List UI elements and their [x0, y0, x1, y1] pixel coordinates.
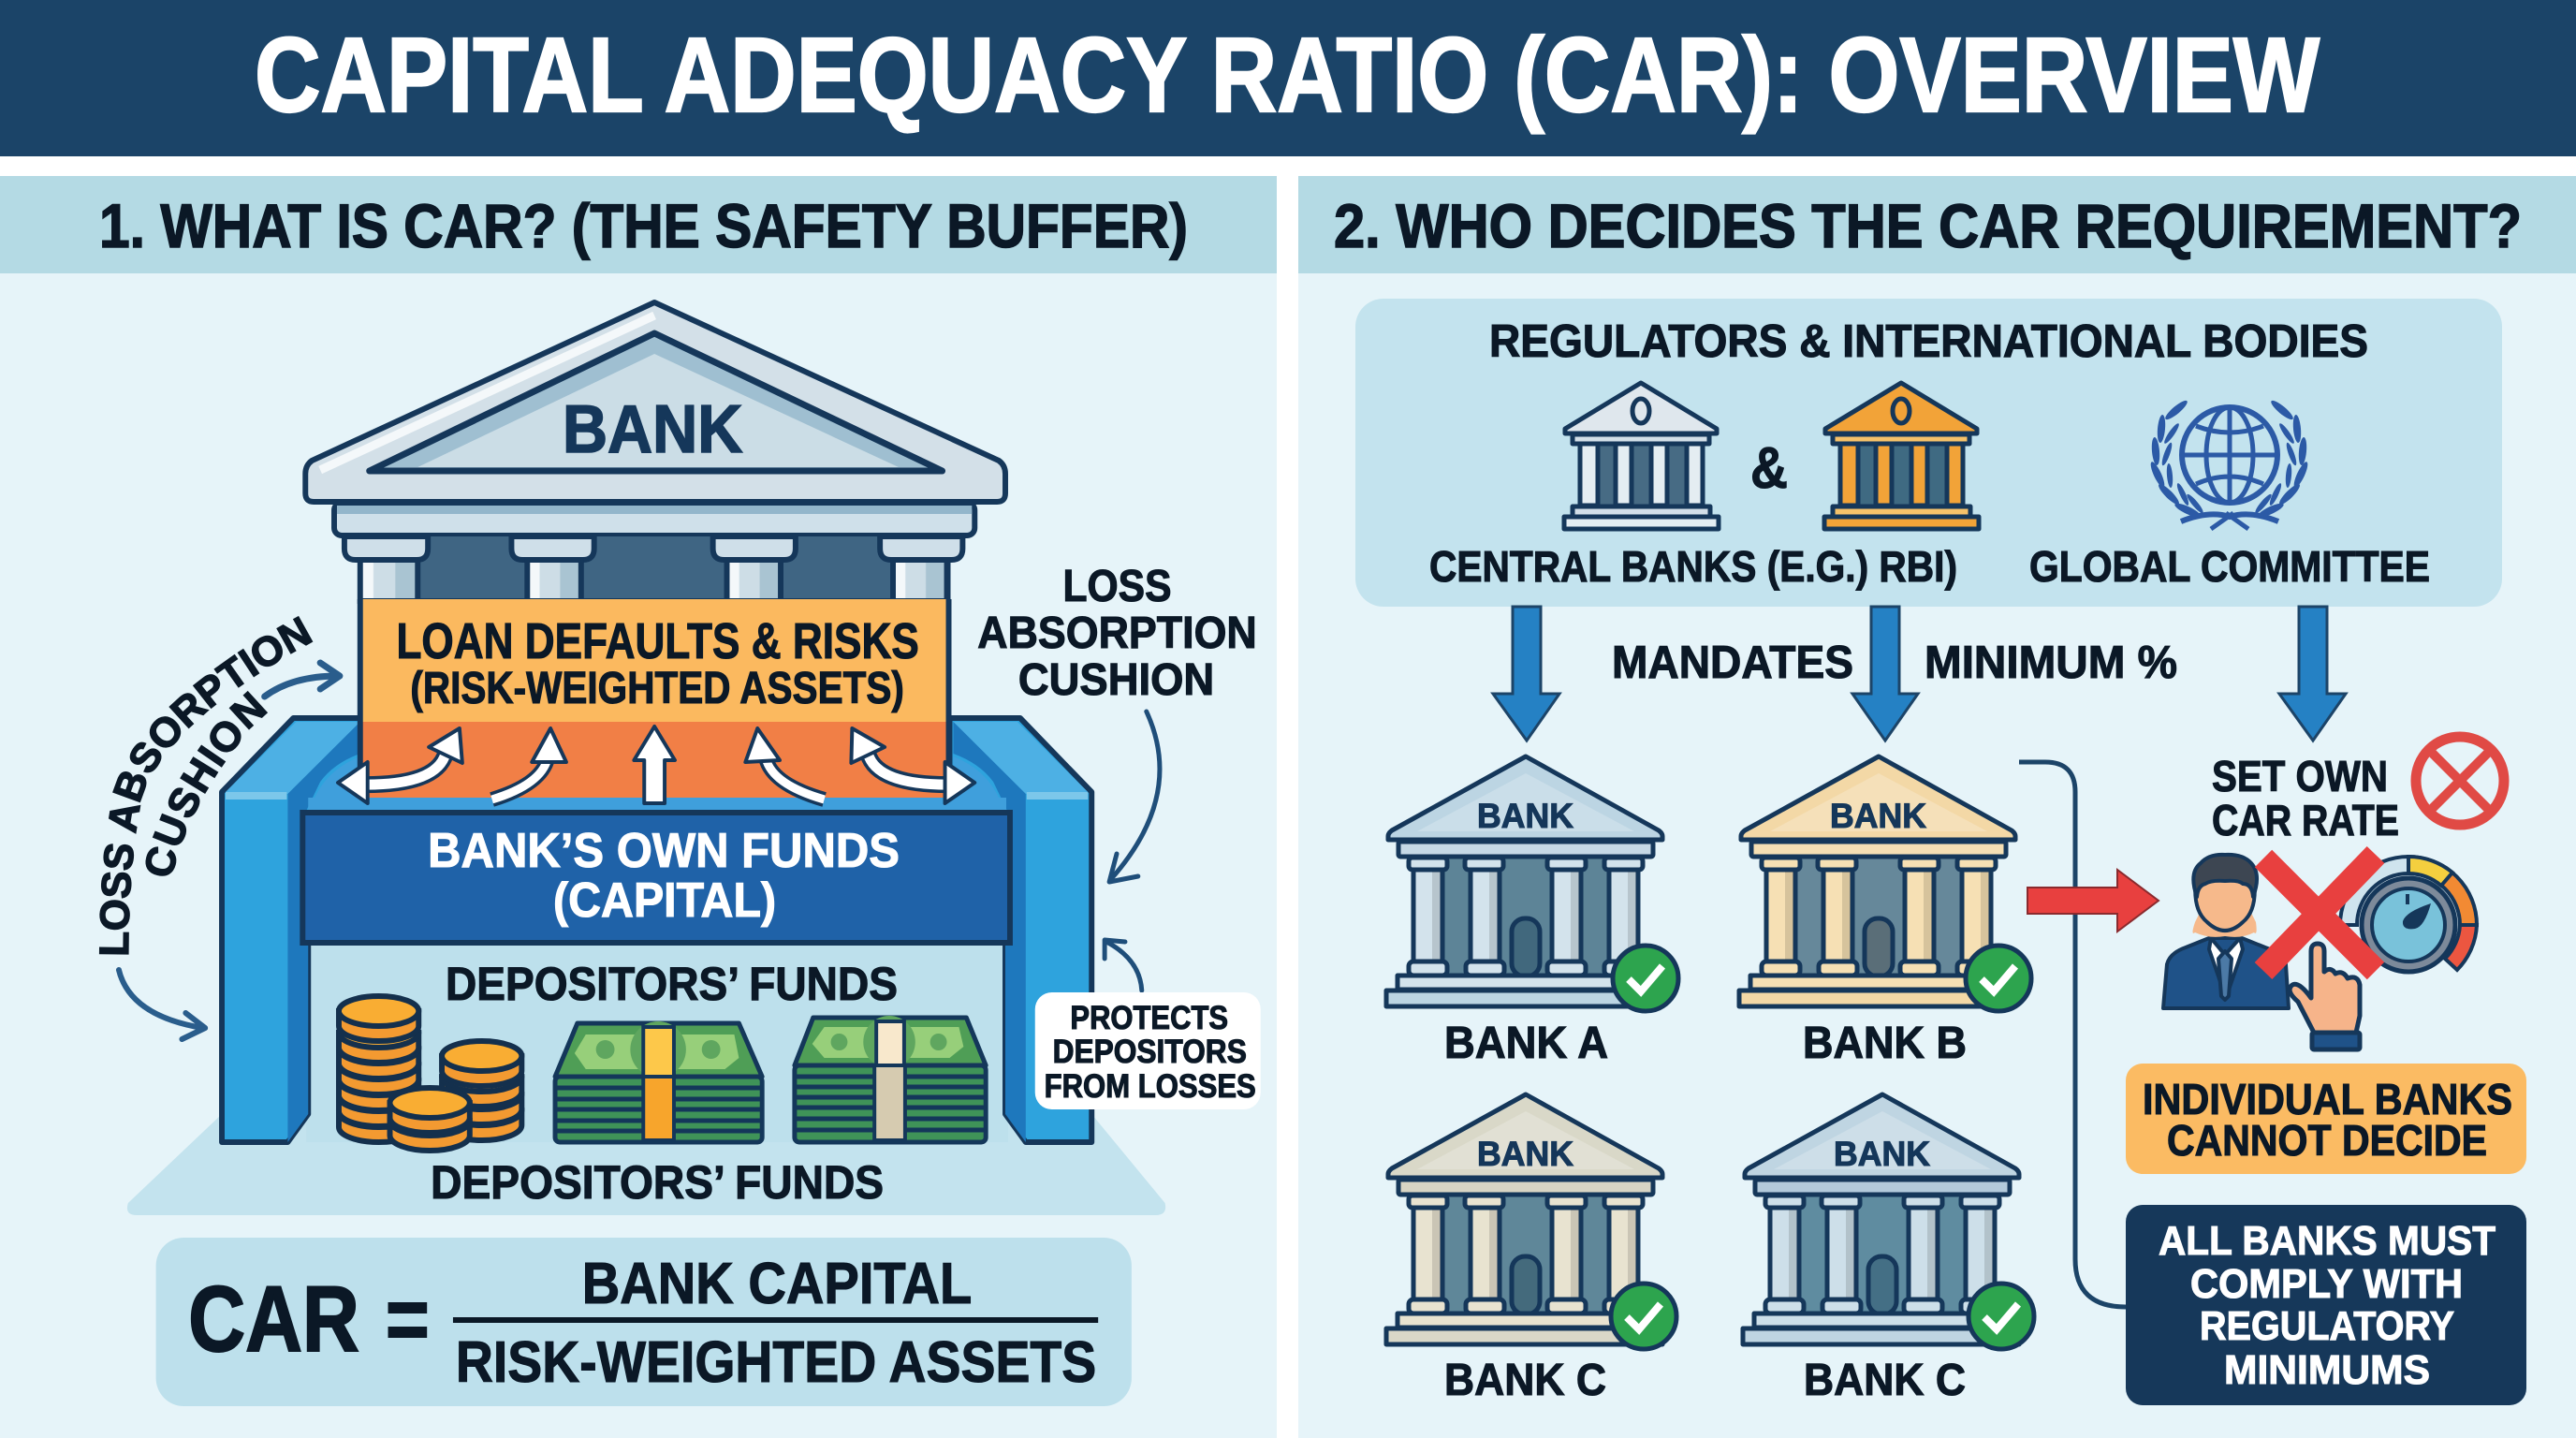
arrow: red pointer: [2027, 870, 2159, 932]
arrow: left cushion lower: [119, 970, 205, 1039]
left curved label: loss absorption cushion: CUSHION: [146, 691, 268, 876]
arrow: down middle: [1852, 607, 1918, 741]
arrow: down left: [1493, 607, 1559, 741]
callout: all banks must comply: ALL BANKS MUST: [2159, 1218, 2496, 1264]
floor platform: [127, 1114, 1165, 1215]
bank C right: BANK: [1834, 1135, 1930, 1173]
label: set own car rate: [2212, 752, 2399, 844]
label: depositors' funds upper: DEPOSITORS’ FUNDS: [446, 958, 898, 1010]
label: mandates: MANDATES: [1612, 638, 1853, 688]
callout: protects depositors: FROM LOSSES: [1045, 1068, 1256, 1105]
bank C left: [1386, 1094, 1676, 1405]
arrow: right cushion: [1109, 712, 1160, 882]
bank's own funds band: (CAPITAL): [553, 873, 776, 927]
white pressure arrows: [338, 726, 974, 803]
illustration: safety buffer: [119, 302, 1261, 1406]
formula: fraction bar: [453, 1317, 1098, 1323]
callout: all banks must comply: MINIMUMS: [2224, 1347, 2430, 1393]
label: depositors' funds lower: DEPOSITORS’ FUNDS: [431, 1156, 884, 1209]
formula: equals: [388, 1302, 427, 1338]
callout: all banks must comply: REGULATORY: [2200, 1303, 2454, 1349]
callout: all banks must comply: [2126, 1205, 2526, 1405]
callout: individual banks cannot decide: CANNOT DECIDE: [2167, 1116, 2487, 1165]
icon: speed gauge: [2340, 857, 2477, 972]
text: loan defaults: LOAN DEFAULTS & RISKS: [396, 613, 919, 669]
right label: loss absorption cushion: CUSHION: [1018, 655, 1214, 705]
icon: globe with wreath: [2148, 398, 2310, 529]
callout: protects depositors: [1035, 992, 1261, 1109]
formula panel: [156, 1238, 1132, 1406]
bank C right: [1743, 1094, 2034, 1405]
blue capital arch: [222, 718, 1091, 1142]
label: bank C right: BANK C: [1804, 1356, 1966, 1405]
label: set own car rate: CAR RATE: [2212, 796, 2399, 844]
arrow: down right: [2279, 607, 2346, 741]
callout: protects depositors: DEPOSITORS: [1053, 1034, 1247, 1070]
formula: CAR: CAR: [188, 1268, 359, 1371]
icon: cash bundle two: [795, 1016, 986, 1142]
bank roof: [305, 302, 1005, 502]
right label: loss absorption cushion: [977, 562, 1257, 705]
bank A: [1386, 756, 1678, 1068]
arrow: protects depositors: [1105, 940, 1142, 990]
bank wall and columns: [344, 535, 962, 601]
icon: central bank orange: [1824, 383, 1979, 529]
panel heading: what is CAR: [0, 176, 1277, 273]
icon: big red cross: [2263, 855, 2376, 971]
label: global committee: GLOBAL COMMITTEE: [2029, 542, 2430, 591]
label: bank A: BANK A: [1444, 1019, 1608, 1068]
bank A: BANK: [1477, 797, 1573, 835]
text: risk-weighted assets: (RISK-WEIGHTED ASSETS): [410, 664, 904, 713]
formula: denominator: RISK-WEIGHTED ASSETS: [456, 1330, 1096, 1395]
icon: cash bundle one: [555, 1021, 762, 1142]
right label: loss absorption cushion: ABSORPTION: [977, 609, 1257, 658]
panel heading: who decides: [1298, 176, 2576, 273]
bank C left: BANK: [1477, 1135, 1573, 1173]
label: set own car rate: SET OWN: [2212, 752, 2388, 800]
right label: loss absorption cushion: LOSS: [1062, 562, 1172, 611]
title: CAPITAL ADEQUACY RATIO (CAR): OVERVIEW: [255, 16, 2320, 134]
formula: numerator: BANK CAPITAL: [582, 1252, 972, 1316]
icon: central bank grey: [1564, 383, 1719, 529]
label: central banks: CENTRAL BANKS (E.G.) RBI): [1429, 542, 1957, 591]
callout: protects depositors: PROTECTS: [1070, 1000, 1228, 1036]
label: bank C left: BANK C: [1444, 1356, 1606, 1405]
bank roof: BANK: [563, 392, 743, 467]
label: minimum percent: MINIMUM %: [1925, 638, 2177, 688]
bank's own funds band: BANK’S OWN FUNDS: [428, 823, 900, 877]
label: bank B: BANK B: [1803, 1019, 1967, 1068]
regulators panel: [1355, 299, 2502, 607]
ampersand: &: [1750, 436, 1788, 501]
connector bracket: [2019, 762, 2126, 1307]
icon: pointing hand: [2290, 944, 2360, 1049]
callout: individual banks cannot decide: [2126, 1064, 2526, 1174]
bank B: [1739, 756, 2031, 1068]
icon: business person: [2163, 855, 2289, 1008]
left curved label: loss absorption cushion: LOSS ABSORPTION: [99, 616, 313, 955]
vault interior: [306, 936, 1008, 1142]
arrow: left cushion upper: [265, 663, 340, 697]
bank's own funds band: [302, 798, 1010, 943]
title banner: [0, 0, 2576, 156]
panel heading: what is CAR: 1. WHAT IS CAR? (THE SAFETY BUFFER): [99, 191, 1188, 260]
entablature: [334, 503, 974, 536]
callout: all banks must comply: COMPLY WITH: [2190, 1261, 2463, 1307]
panel: what is CAR: [0, 176, 1277, 1438]
icon: coin stacks: [339, 996, 521, 1151]
panel: who decides: [1298, 176, 2576, 1438]
bank B: BANK: [1830, 797, 1926, 835]
bank building: [305, 302, 1005, 601]
icon: red cross circle: [2416, 737, 2504, 825]
risk-weighted assets block: [360, 599, 949, 800]
regulators heading: REGULATORS & INTERNATIONAL BODIES: [1489, 316, 2368, 367]
callout: individual banks cannot decide: INDIVIDUAL BANKS: [2143, 1075, 2512, 1123]
